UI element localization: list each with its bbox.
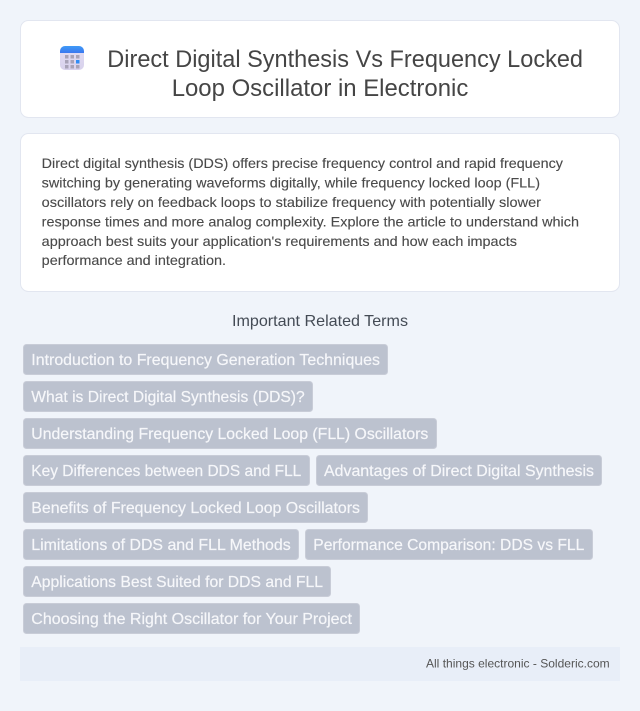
chip: applications: Applications Best Suited for DDS and FLL [31, 574, 323, 591]
chip: limitations: Limitations of DDS and FLL Methods [31, 537, 291, 554]
chip: understanding FLL: Understanding Frequency Locked Loop (FLL) Oscillators [31, 426, 428, 443]
chip: limitations [24, 530, 298, 560]
title: Loop Oscillator in Electronic [172, 75, 468, 102]
icon: calendar grid [60, 46, 84, 70]
text block: description: performance and integration. [42, 252, 226, 268]
footer [20, 647, 620, 681]
panel: header card [20, 20, 620, 118]
chip: introduction [24, 344, 388, 374]
chip: what is DDS [24, 382, 312, 412]
chip: advantages [316, 456, 602, 486]
text block: description: switching by generating waveforms digitally, while frequency locked loop (FLL) [42, 174, 540, 190]
title [107, 46, 583, 102]
chip: performance comparison [306, 530, 592, 560]
text block: description [42, 155, 579, 268]
chip: introduction: Introduction to Frequency Generation Techniques [31, 352, 380, 369]
footer: All things electronic - Solderic.com [426, 656, 610, 670]
text block: description: response times and more analog complexity. Explore the article to understand which [42, 214, 579, 230]
chip: key differences: Key Differences between DDS and FLL [31, 463, 301, 480]
chip: advantages: Advantages of Direct Digital Synthesis [324, 463, 594, 480]
chip: applications [24, 566, 330, 596]
text block: description: approach best suits your application's requirements and how each impacts [42, 233, 517, 249]
chip: key differences [24, 456, 310, 486]
chip: benefits [24, 492, 368, 522]
title: Direct Digital Synthesis Vs Frequency Locked [107, 46, 583, 73]
text block: description: oscillators rely on feedback loops to stabilize frequency with potentially slower [42, 194, 541, 210]
panel: description card [20, 134, 620, 292]
chip: choosing oscillator: Choosing the Right Oscillator for Your Project [31, 611, 353, 628]
text block: description: Direct digital synthesis (DDS) offers precise frequency control and rapid frequency [42, 155, 563, 171]
chip: benefits: Benefits of Frequency Locked Loop Oscillators [31, 500, 360, 517]
chip: what is DDS: What is Direct Digital Synthesis (DDS)? [31, 389, 305, 406]
panel: related terms chips [24, 344, 602, 634]
heading: important related terms: Important Related Terms [232, 313, 408, 330]
chip: choosing oscillator [24, 604, 360, 634]
chip: understanding FLL [24, 418, 436, 448]
chip: performance comparison: Performance Comparison: DDS vs FLL [313, 537, 584, 554]
